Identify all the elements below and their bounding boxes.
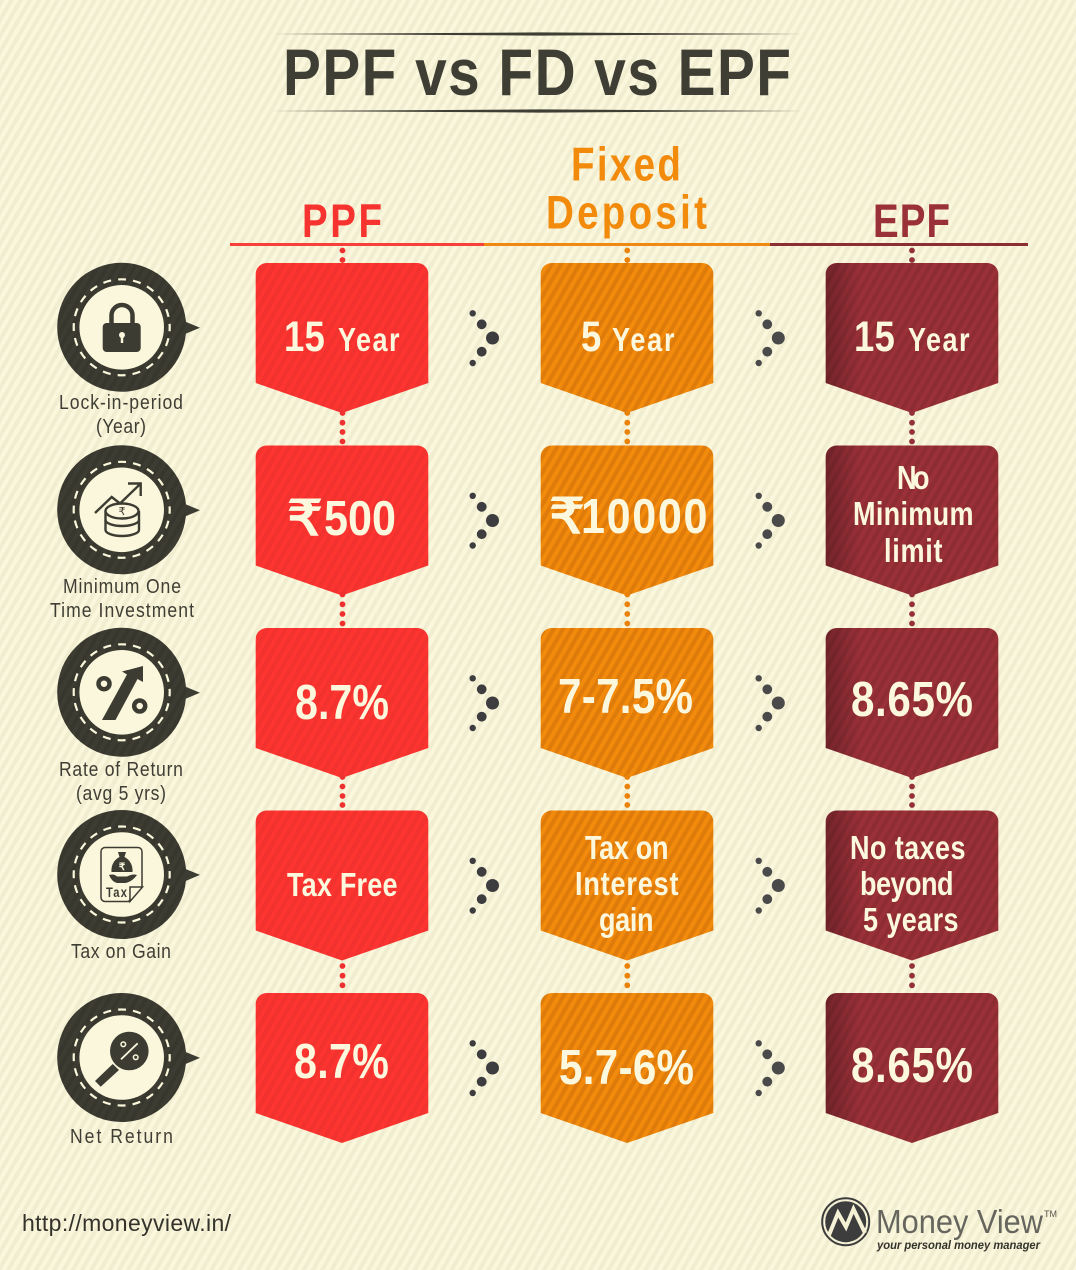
column heading: PPF: PPF (302, 195, 382, 248)
row 2 PPF card: ₹ (287, 491, 323, 546)
row 4 EPF card: 5 years (863, 903, 959, 939)
row 4 icon: tax document (57, 810, 200, 939)
logo: Money View: your personal money manager (876, 1240, 1040, 1252)
row 1 FD card: 5 (581, 313, 601, 361)
row 4 label: Tax on Gain (71, 940, 171, 962)
row 2 PPF card: 500 (324, 490, 396, 546)
row 1 EPF card: 15 (854, 313, 895, 361)
row 4 PPF card: Tax Free (287, 868, 398, 904)
row 5 PPF card (256, 993, 428, 1143)
row 3 FD card: 7-7.5% (558, 669, 693, 724)
row 4 FD card: Tax on (585, 831, 668, 867)
row 5 chevron (470, 1040, 499, 1096)
row 1 label: (Year) (96, 415, 146, 437)
row 2 chevron (470, 493, 499, 549)
connectors row 2-3 (340, 592, 915, 626)
row 3 label (59, 758, 183, 804)
column heading: Fixed Deposit: Deposit (546, 187, 707, 239)
row 5 chevron 2 (756, 1040, 785, 1096)
logo: Money View: Money View (876, 1203, 1043, 1240)
row 1 PPF card: 15 (284, 313, 325, 361)
connectors row 1-2 (340, 410, 915, 444)
row 2 FD card: 10000 (581, 488, 708, 544)
row 2 PPF card (256, 446, 428, 596)
row 2 FD card (541, 446, 713, 596)
row 5 label: Net Return (70, 1125, 173, 1147)
row 2 EPF card: limit (884, 534, 942, 570)
row 1 label (59, 391, 183, 437)
row 2 icon: coins and rising arrow: ₹ (118, 506, 126, 518)
row 1 label: Lock-in-period (59, 391, 183, 413)
row 1 icon: lock (57, 263, 200, 392)
title: PPF vs FD vs EPF (283, 36, 791, 110)
row 3 EPF card (826, 628, 998, 778)
row 2 label: Time Investment (50, 599, 195, 621)
logo: Money View (822, 1198, 1057, 1252)
row 3 chevron 2 (756, 675, 785, 731)
column heading: EPF: EPF (873, 195, 950, 248)
column heading: Fixed Deposit: Fixed (571, 139, 681, 191)
column heading: Fixed Deposit (484, 139, 770, 263)
row 4 FD card: gain (599, 903, 654, 939)
row 1 PPF card (256, 263, 428, 413)
logo: Money View: TM (1044, 1209, 1057, 1219)
footer url: http://moneyview.in/ (22, 1210, 232, 1236)
row 5 EPF card (826, 993, 998, 1143)
row 4 chevron 2 (756, 858, 785, 914)
row 4 icon: tax document: ₹ (119, 862, 126, 873)
row 3 label: (avg 5 yrs) (76, 782, 166, 804)
row 3 FD card (541, 628, 713, 778)
row 2 chevron 2 (756, 493, 785, 549)
row 1 FD card (541, 263, 713, 413)
column heading: PPF (230, 195, 484, 263)
row 4 PPF card (256, 810, 428, 960)
row 5 EPF card: 8.65% (851, 1038, 973, 1093)
row 2 EPF card: Minimum (853, 497, 974, 533)
row 2 label: Minimum One (63, 575, 181, 597)
row 3 PPF card (256, 628, 428, 778)
row 2 icon: coins and rising arrow (57, 445, 200, 574)
row 3 PPF card: 8.7% (295, 675, 389, 730)
row 4 FD card (541, 810, 713, 960)
row 4 FD card: Interest (575, 867, 678, 903)
row 2 EPF card (826, 446, 998, 596)
row 3 EPF card: 8.65% (851, 672, 973, 727)
row 2 label (50, 575, 195, 621)
row 1 FD card: Year (612, 323, 675, 359)
row 1 chevron (470, 310, 499, 366)
row 4 EPF card: No taxes (850, 831, 966, 867)
row 5 icon: magnifier with percent (57, 993, 200, 1122)
row 1 EPF card (826, 263, 998, 413)
row 3 chevron (470, 675, 499, 731)
connectors row 4-5 (340, 963, 915, 988)
row 4 icon: tax document: Tax (106, 885, 127, 900)
row 3 label: Rate of Return (59, 758, 183, 780)
connectors row 3-4 (340, 774, 915, 808)
row 5 FD card (541, 993, 713, 1143)
row 3 icon: percent arrow (57, 628, 200, 757)
row 4 EPF card: beyond (860, 867, 953, 903)
row 5 PPF card: 8.7% (294, 1034, 389, 1089)
row 4 EPF card (826, 810, 998, 960)
column heading: EPF (770, 195, 1028, 263)
row 4 chevron (470, 858, 499, 914)
row 1 EPF card: Year (908, 323, 970, 359)
row 2 EPF card: No (897, 461, 929, 497)
row 2 FD card: ₹ (549, 489, 585, 544)
row 5 FD card: 5.7-6% (559, 1040, 694, 1095)
row 1 PPF card: Year (338, 323, 400, 359)
row 1 chevron 2 (756, 310, 785, 366)
